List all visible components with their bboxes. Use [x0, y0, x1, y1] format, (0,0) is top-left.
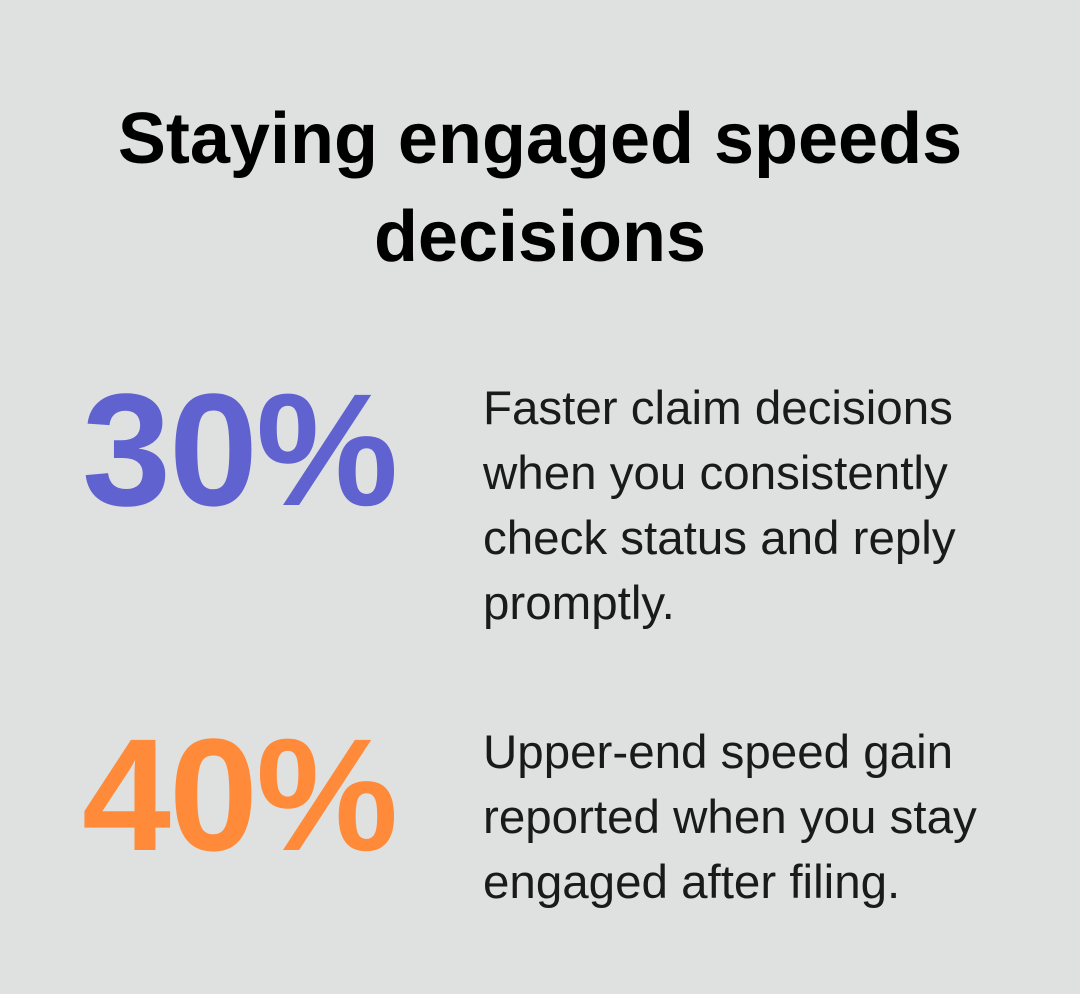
- stat block: 30%: [82, 360, 956, 630]
- stat description 2: Upper-end speed gain reported when you stay engaged after filing.: [483, 726, 977, 909]
- title: decisions: [374, 197, 706, 277]
- title: Staying engaged speeds: [118, 99, 962, 179]
- stat number 40%: 40%: [82, 705, 396, 884]
- stat description 1: Faster claim decisions when you consistently check status and reply promptly.: [483, 382, 956, 630]
- stat number 30%: 30%: [82, 360, 396, 539]
- title: [118, 99, 962, 277]
- stat block: 40%: [82, 705, 977, 909]
